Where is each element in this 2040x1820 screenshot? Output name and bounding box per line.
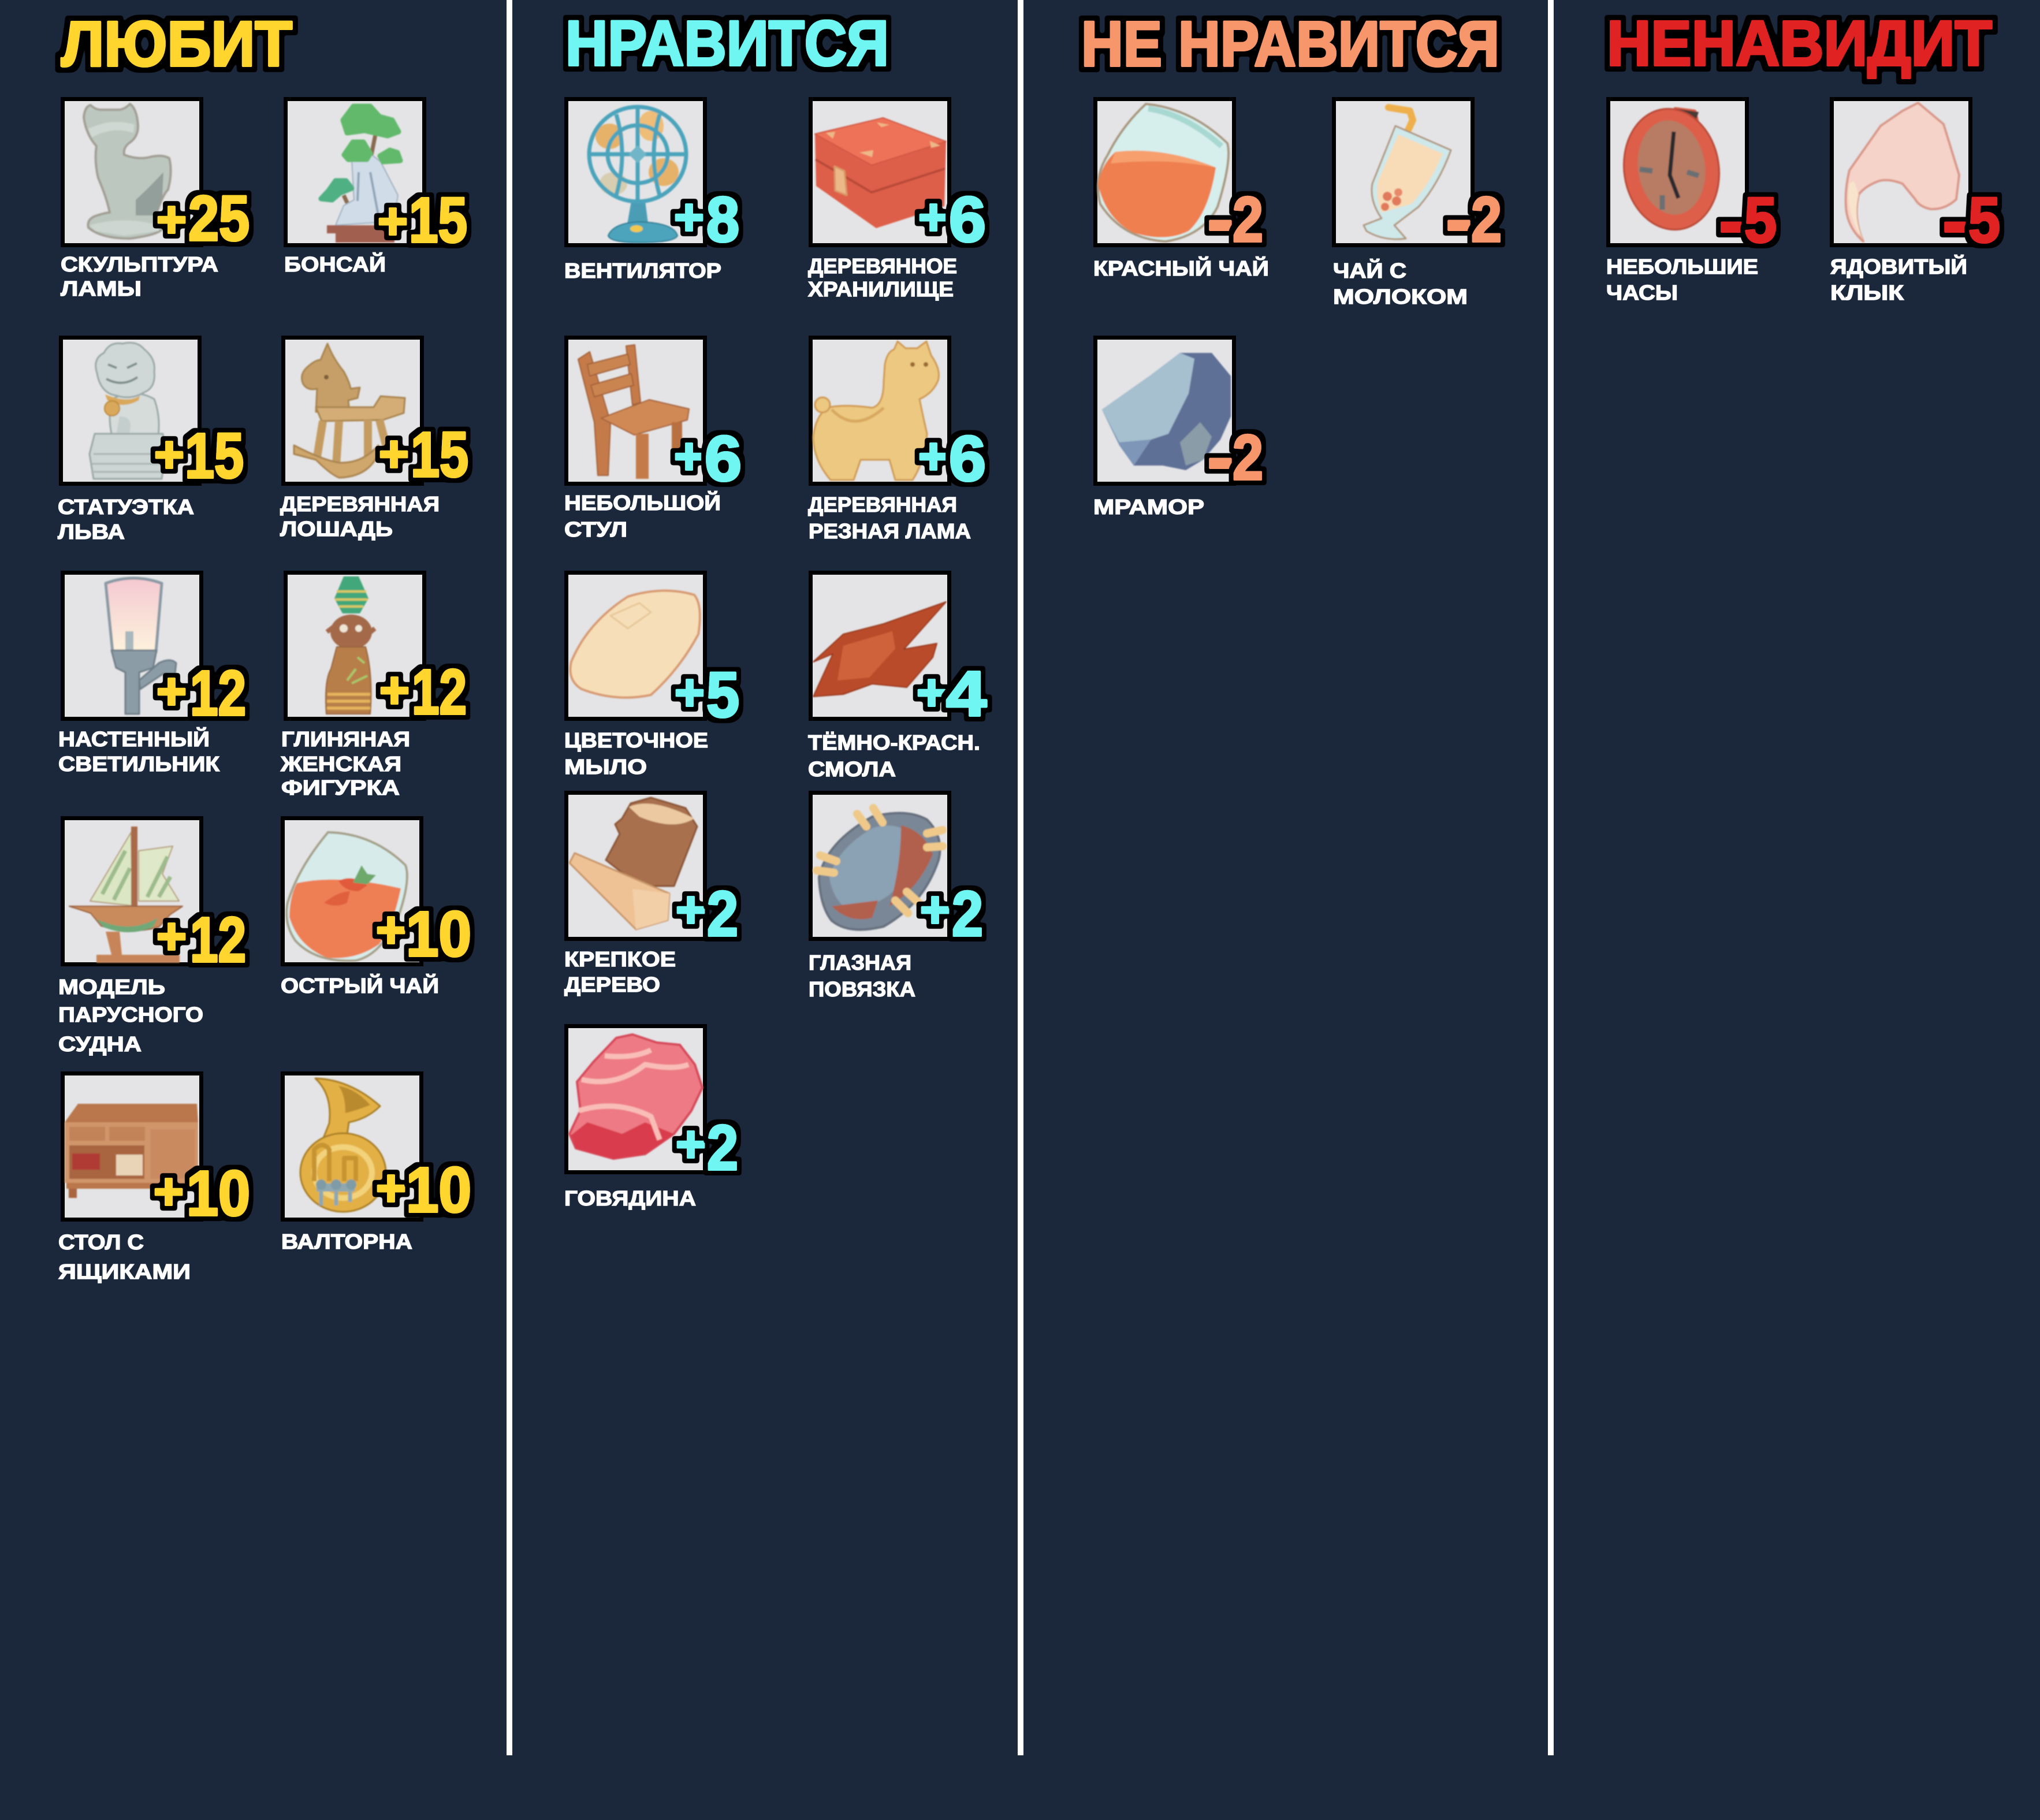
label: МЫЛО [564, 755, 647, 779]
item: говядина [564, 1026, 738, 1210]
item: бонсай [284, 99, 467, 276]
score +2: 2 [707, 1112, 738, 1183]
item: красный чай [1093, 99, 1269, 280]
label: ПОВЯЗКА [809, 977, 915, 1001]
score +10 [154, 1158, 250, 1229]
score -5: - [1942, 178, 1969, 263]
score +12: 12 [412, 657, 467, 728]
score -2: 2 [1233, 422, 1263, 493]
score -2 [1446, 177, 1502, 261]
score +2 [920, 879, 983, 950]
score +10: 10 [187, 1158, 250, 1229]
label: БОНСАЙ [284, 252, 386, 276]
label: НЕБОЛЬШИЕ [1606, 255, 1758, 278]
label [564, 947, 676, 996]
score +15: 15 [185, 420, 244, 492]
score -5 [1942, 178, 2000, 263]
item: статуэтка льва [58, 337, 244, 544]
item: крепкое дерево [564, 792, 738, 996]
icon: small wooden chair [566, 337, 705, 484]
label: ФИГУРКА [281, 776, 400, 799]
score +5: 5 [706, 660, 739, 731]
score -2: - [1446, 177, 1472, 261]
label: ПАРУСНОГО [58, 1003, 203, 1026]
label: ВЕНТИЛЯТОР [564, 259, 721, 282]
item: скульптура ламы [61, 99, 250, 300]
icon: fan [566, 99, 705, 245]
label: ЛЬВА [58, 520, 125, 544]
icon: beef [566, 1026, 705, 1173]
score +12 [379, 657, 467, 728]
item: деревянное хранилище [808, 99, 986, 301]
label: ЦВЕТОЧНОЕ [564, 728, 708, 752]
score +12: + [157, 663, 187, 720]
score +12: + [157, 907, 187, 965]
label: ЧАСЫ [1606, 281, 1678, 304]
label [808, 493, 971, 543]
item: деревянная лошадь [280, 337, 468, 541]
score +6: 6 [705, 423, 742, 494]
score +6 [918, 423, 986, 494]
item: деревянная резная лама [808, 337, 986, 543]
score +2: + [676, 1115, 706, 1173]
label [808, 731, 980, 781]
score +6: + [918, 427, 948, 485]
icon: red tea [1095, 99, 1234, 245]
label: СВЕТИЛЬНИК [58, 752, 220, 776]
score +6: 6 [949, 423, 986, 494]
label [809, 951, 915, 1001]
score -5: - [1719, 178, 1744, 263]
label [1830, 254, 1967, 304]
label [61, 252, 218, 300]
label: КРЕПКОЕ [564, 947, 676, 971]
item: глазная повязка [809, 792, 983, 1001]
icon: table with drawers [62, 1073, 201, 1220]
icon: sturdy wood [566, 792, 705, 939]
score -2: 2 [1233, 184, 1263, 255]
score -2: - [1207, 177, 1234, 261]
item: модель парусного судна [58, 818, 246, 1056]
score +10: 10 [406, 899, 471, 970]
score -2: - [1207, 415, 1234, 499]
score -5: 5 [1744, 185, 1777, 256]
item: цветочное мыло [564, 573, 739, 779]
item: небольшой стул [564, 337, 742, 541]
label: ДЕРЕВЯННОЕ [808, 254, 957, 278]
column: НЕНАВИДИТ [1606, 8, 2000, 304]
score +25: 25 [188, 183, 250, 254]
icon: wall lamp [62, 573, 201, 719]
label [564, 728, 708, 779]
score +15: 15 [409, 185, 467, 256]
label: КРАСНЫЙ ЧАЙ [1093, 256, 1269, 280]
label [1333, 258, 1468, 308]
item: вентилятор [564, 99, 739, 282]
score +10 [376, 1155, 471, 1226]
score -2 [1207, 177, 1263, 261]
score +6 [918, 184, 986, 255]
score +15: + [379, 425, 409, 482]
score -5 [1719, 178, 1777, 263]
icon: bonsai [285, 99, 424, 245]
score -2: 2 [1471, 184, 1502, 255]
label: НАСТЕННЫЙ [58, 727, 210, 751]
score +4: 4 [946, 658, 987, 730]
label: СТОЛ С [58, 1230, 144, 1254]
label [58, 1230, 191, 1283]
label [280, 492, 440, 541]
item: чай с молоком [1333, 99, 1502, 308]
score +15 [154, 420, 244, 492]
score +10: + [376, 1159, 406, 1216]
item: острый чай [281, 818, 471, 998]
label: ЯДОВИТЫЙ [1830, 254, 1967, 278]
score +15 [379, 419, 468, 490]
label: НЕБОЛЬШОЙ [564, 490, 721, 515]
label: ТЁМНО-КРАСН. [808, 731, 980, 754]
label: ГЛАЗНАЯ [809, 951, 911, 974]
score +12: 12 [190, 905, 246, 976]
label: СУДНА [58, 1032, 142, 1056]
icon: poison fang [1832, 99, 1971, 245]
score +2 [676, 879, 738, 950]
score -2 [1207, 415, 1263, 499]
label: ЛОШАДЬ [280, 517, 393, 541]
label: СТУЛ [564, 518, 627, 541]
item: тёмно-красная смола [808, 573, 987, 781]
icon: carved wooden llama [811, 337, 950, 484]
item: стол с ящиками [58, 1073, 250, 1283]
score +15: + [378, 192, 408, 250]
label: ЛАМЫ [61, 277, 142, 300]
score +8: + [674, 188, 704, 245]
score +2: + [676, 881, 706, 938]
label [1606, 255, 1758, 304]
icon: french horn [283, 1073, 422, 1220]
score +10: + [154, 1163, 184, 1220]
score +4: + [917, 664, 947, 721]
label: МРАМОР [1093, 495, 1204, 519]
heading: НЕ НРАВИТСЯ: НЕ НРАВИТСЯ [1081, 9, 1499, 80]
label: МОЛОКОМ [1333, 285, 1468, 308]
item: небольшие часы [1606, 99, 1777, 304]
score +6 [674, 423, 742, 494]
column: НЕ НРАВИТСЯ [1081, 9, 1502, 519]
label: СМОЛА [808, 757, 896, 781]
label: ОСТРЫЙ ЧАЙ [281, 973, 439, 998]
label: ГЛИНЯНАЯ [281, 727, 410, 751]
label: ВАЛТОРНА [281, 1230, 412, 1253]
score +15: + [154, 426, 184, 483]
score +10 [376, 899, 471, 970]
score +6: 6 [949, 184, 986, 255]
score +6: + [918, 188, 948, 245]
icon: wooden rocking horse [283, 337, 422, 484]
score -5: 5 [1968, 185, 2000, 256]
score +8 [674, 184, 739, 255]
label [564, 490, 721, 541]
score +8: 8 [706, 184, 739, 255]
heading: НРАВИТСЯ: НРАВИТСЯ [565, 8, 889, 79]
label: МОДЕЛЬ [58, 975, 165, 999]
column: ЛЮБИТ [58, 9, 471, 1283]
score +6: + [674, 427, 704, 485]
item: ядовитый клык [1830, 99, 2000, 304]
heading: ЛЮБИТ: ЛЮБИТ [61, 9, 292, 80]
score +12 [157, 658, 246, 729]
icon: marble [1095, 337, 1234, 484]
score +5 [675, 660, 739, 731]
icon: spicy tea [283, 818, 422, 965]
label: ДЕРЕВО [564, 973, 660, 996]
icon: clay female figurine [285, 573, 424, 719]
label: ДЕРЕВЯННАЯ [808, 493, 957, 516]
label [58, 975, 203, 1056]
column: НРАВИТСЯ [564, 8, 987, 1210]
icon: flower soap [566, 573, 705, 719]
label [280, 727, 410, 799]
label: ЧАЙ С [1333, 258, 1406, 282]
label: СТАТУЭТКА [58, 495, 194, 519]
score +15: 15 [411, 419, 468, 490]
label: ГОВЯДИНА [564, 1186, 696, 1210]
label [58, 727, 220, 776]
icon: sailing ship model [62, 818, 201, 965]
item: мрамор [1093, 337, 1263, 519]
item: глиняная женская фигурка [280, 573, 467, 799]
icon: lion statuette [61, 337, 200, 484]
heading: НЕНАВИДИТ: НЕНАВИДИТ [1607, 8, 1992, 79]
icon: llama sculpture [62, 99, 201, 245]
icon: eye patch [811, 792, 950, 939]
label: РЕЗНАЯ ЛАМА [809, 519, 971, 543]
score +15 [378, 185, 467, 256]
item: настенный светильник [58, 573, 246, 776]
label: ЖЕНСКАЯ [280, 752, 401, 776]
score +2: 2 [707, 879, 738, 950]
label: СКУЛЬПТУРА [61, 252, 218, 276]
score +10: + [376, 901, 406, 958]
item: валторна [281, 1073, 471, 1253]
score +25 [157, 183, 250, 254]
label [808, 254, 957, 301]
score +2: + [920, 881, 950, 938]
label [58, 495, 194, 544]
label: КЛЫК [1830, 281, 1904, 304]
icon: small clock [1608, 99, 1747, 245]
icon: red storage chest [811, 99, 950, 245]
score +12 [157, 905, 246, 976]
score +2: 2 [952, 879, 983, 950]
score +12: + [379, 661, 410, 719]
label: ХРАНИЛИЩЕ [808, 277, 954, 301]
score +25: + [157, 191, 187, 248]
icon: milk tea [1334, 99, 1473, 245]
score +2 [676, 1112, 738, 1183]
label: ЯЩИКАМИ [58, 1260, 191, 1283]
icon: dark red resin [811, 573, 950, 719]
label: ДЕРЕВЯННАЯ [280, 492, 440, 516]
score +10: 10 [406, 1155, 471, 1226]
score +5: + [675, 664, 705, 721]
score +4 [917, 658, 987, 730]
score +12: 12 [190, 658, 246, 729]
